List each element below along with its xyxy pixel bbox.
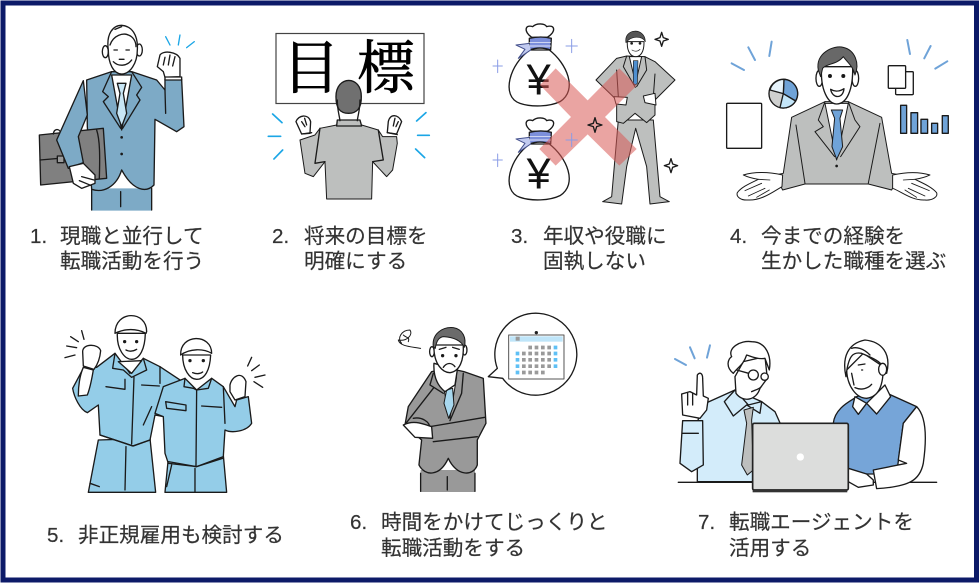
illustration: presenter with charts — [727, 40, 948, 200]
sign board with goal text: 目 — [282, 21, 340, 105]
caption 7: 転職エージェントを — [729, 511, 914, 534]
speech bubble with calendar — [488, 313, 577, 395]
caption 1: 転職活動を行う — [60, 250, 204, 273]
sign board with goal text — [276, 21, 424, 105]
caption 5: 非正規雇用も検討する — [78, 524, 284, 547]
caption 2: 将来の目標を — [304, 225, 428, 248]
panel: step 2 — [268, 21, 429, 273]
caption 6: 時間をかけてじっくりと — [381, 511, 608, 534]
caption 3: 年収や役職に — [543, 225, 667, 248]
caption 4: 生かした職種を選ぶ — [761, 250, 946, 273]
caption 1: 1. — [30, 225, 47, 248]
illustration: two men with a laptop — [675, 340, 937, 492]
caption 2: 2. — [272, 225, 289, 248]
illustration: worried man — [398, 328, 486, 492]
illustration: money bags and man: ¥ — [526, 150, 552, 198]
caption 3: 固執しない — [543, 250, 646, 273]
caption 7: 7. — [698, 511, 715, 534]
panel: step 5 — [47, 316, 284, 547]
panel: step 3 — [493, 24, 678, 273]
illustration: money bags and man: ¥ — [526, 56, 552, 104]
caption 2: 明確にする — [304, 250, 407, 273]
illustration: man seen from the back — [268, 80, 429, 199]
panel: step 7 — [675, 340, 937, 560]
illustration: businessman with briefcase — [39, 25, 194, 211]
panel: step 4 — [727, 40, 948, 273]
caption 4: 4. — [730, 225, 747, 248]
illustration: two workers in overalls — [65, 316, 265, 492]
caption 6: 転職活動をする — [381, 537, 525, 560]
caption 1: 現職と並行して — [60, 225, 204, 248]
panel: step 1 — [30, 25, 204, 273]
illustration: money bags and man — [493, 24, 678, 204]
caption 5: 5. — [47, 524, 64, 547]
caption 4: 今までの経験を — [761, 225, 905, 248]
caption 6: 6. — [350, 511, 367, 534]
panel: step 6 — [350, 313, 608, 560]
caption 7: 活用する — [729, 537, 811, 560]
caption 3: 3. — [511, 225, 528, 248]
sign board with goal text: 標 — [357, 21, 416, 105]
